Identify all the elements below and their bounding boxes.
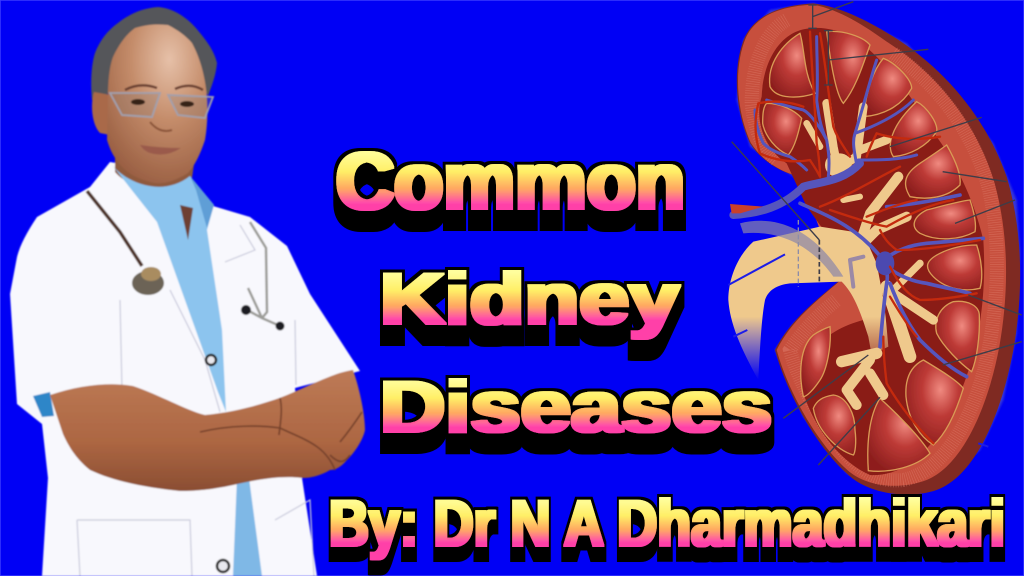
- head hair: [91, 7, 217, 100]
- title: Common: Common: [336, 136, 685, 227]
- pyramid 8: [936, 301, 979, 372]
- stethoscope ear tips: [241, 305, 284, 330]
- pyramid 1: [770, 33, 815, 97]
- title: Diseases: Diseases: [380, 367, 772, 448]
- lower faded vein: [850, 257, 863, 287]
- outer capsule: [737, 3, 1020, 495]
- eyebrows: [125, 85, 203, 90]
- hilum vessel end: [730, 204, 763, 213]
- nose shadow: [150, 122, 172, 131]
- translucent hilum band: [740, 221, 843, 277]
- cortex: [738, 5, 1006, 486]
- pyramid 13: [763, 103, 802, 155]
- pyramid 7: [928, 245, 982, 290]
- lower calyx branches: [842, 353, 877, 362]
- stethoscope right tube: [247, 222, 280, 326]
- renal vein main: [733, 163, 860, 215]
- upper arteries: [755, 32, 940, 177]
- stethoscope chest piece: [132, 267, 164, 295]
- pyramid 3: [863, 58, 912, 117]
- crossed arms: [50, 370, 365, 491]
- ear: [92, 92, 110, 135]
- renal pyramids: [763, 31, 982, 471]
- renal pelvis and ureter: [728, 227, 888, 380]
- arteries: [755, 32, 980, 443]
- pointer lines: [732, 2, 1022, 465]
- shirt sleeve edge: [33, 392, 54, 417]
- eyes: [131, 99, 194, 107]
- shirt: [112, 165, 226, 412]
- face: [107, 24, 207, 183]
- calyces: [807, 103, 933, 405]
- blue glow: [737, 3, 1020, 493]
- shirt lower placket: [233, 478, 262, 576]
- coat buttons: [206, 355, 229, 572]
- pyramid 11: [813, 395, 856, 455]
- hand creases: [200, 398, 362, 470]
- cortex stripes: [752, 20, 997, 480]
- glasses: [110, 93, 213, 118]
- upper calyx branches: [827, 103, 887, 165]
- kidney illustration: [728, 2, 1022, 495]
- pyramid 4: [890, 102, 937, 157]
- middle arteries: [820, 167, 980, 250]
- lower vein hub: [876, 251, 894, 275]
- pyramid 12: [801, 327, 830, 397]
- pyramid 9: [906, 360, 963, 445]
- upper vein branches: [755, 37, 917, 177]
- mouth: [140, 145, 181, 155]
- title: Kidney: Kidney: [380, 259, 679, 340]
- doctor coat: [10, 162, 360, 576]
- medulla: [759, 28, 984, 475]
- blue cut lines on ureter: [728, 254, 988, 447]
- pyramid 5: [906, 145, 960, 198]
- neck: [115, 150, 196, 188]
- brackets and leaders: [808, 2, 928, 85]
- coat shading: [77, 225, 314, 576]
- pyramid 6: [914, 200, 975, 239]
- photo: doctor in white coat: [10, 7, 365, 576]
- lower vein branches: [800, 195, 983, 377]
- shirt collar shadow: [190, 176, 214, 228]
- neck gap under collar: [180, 205, 193, 240]
- stethoscope left tube: [87, 191, 142, 266]
- lower arteries: [883, 267, 977, 443]
- central calyx: [837, 130, 840, 200]
- veins: [733, 37, 983, 377]
- pyramid 2: [827, 31, 870, 103]
- pyramid 10: [868, 398, 930, 471]
- middle calyx branches: [863, 177, 907, 240]
